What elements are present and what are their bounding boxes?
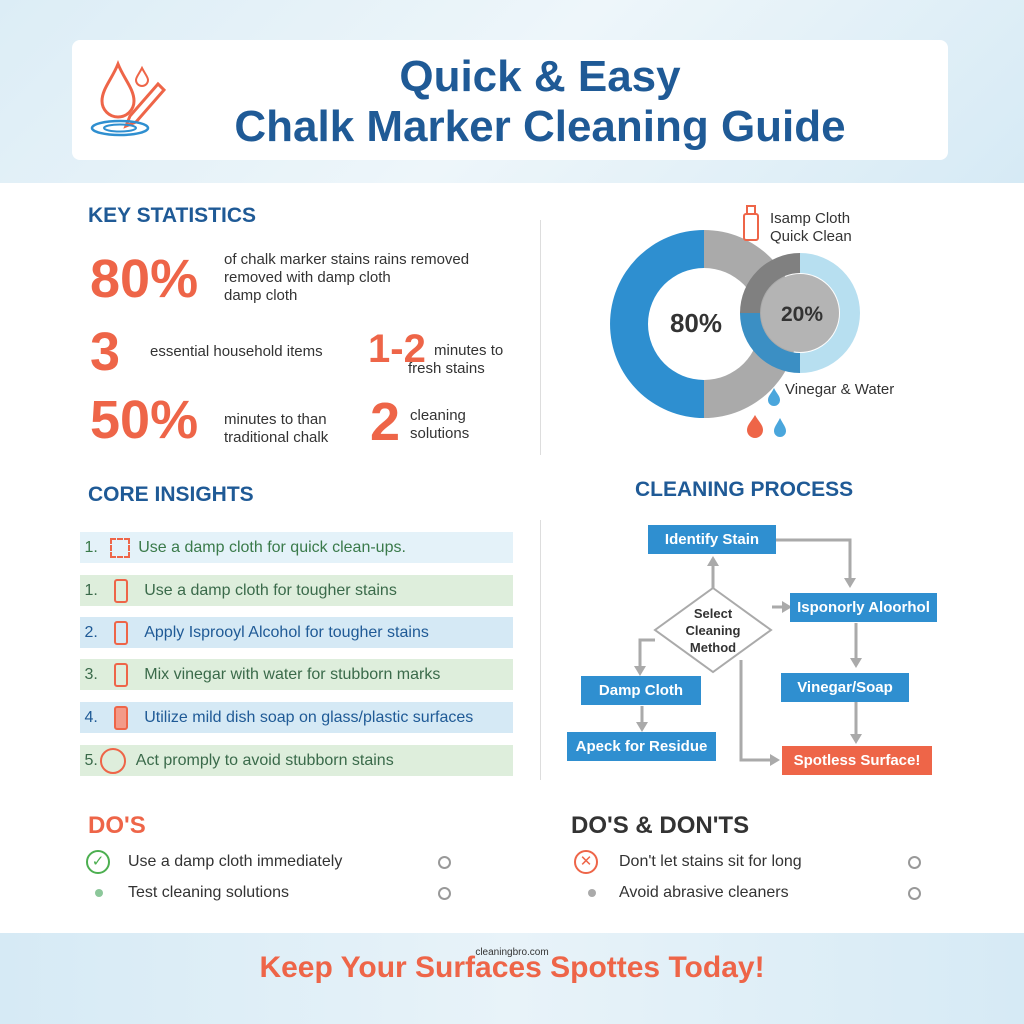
do's & don'ts heading: DO'S & DON'TS — [571, 812, 749, 839]
background top — [0, 0, 1024, 183]
donut chart — [610, 205, 894, 438]
stats block: cleaning — [410, 407, 466, 424]
insights list: 1. Use a damp cloth for tougher stains — [84, 582, 397, 599]
don'ts list: Don't let stains sit for long — [619, 853, 802, 870]
insights list: 5. Act promply to avoid stubborn stains — [84, 752, 394, 769]
don'ts list: Avoid abrasive cleaners — [619, 884, 789, 901]
stats block: traditional chalk — [224, 429, 328, 446]
heading: key statistics: KEY STATISTICS — [88, 204, 256, 227]
insights list: 4. Utilize mild dish soap on glass/plastic surfaces — [84, 709, 473, 726]
stats block: removed with damp cloth — [224, 269, 391, 286]
do's heading: DO'S — [88, 812, 146, 839]
stats block: minutes to than — [224, 411, 327, 428]
flowchart: Damp Cloth — [599, 682, 683, 699]
footer slogan: Keep Your Surfaces Spottes Today! — [259, 951, 765, 984]
stats block: 1-2 — [368, 327, 426, 371]
footer band — [0, 933, 1024, 1024]
stats block: minutes to — [434, 342, 503, 359]
stats block: damp cloth — [224, 287, 297, 304]
flowchart: Select — [694, 606, 733, 621]
insights list — [80, 532, 513, 776]
donut chart: Quick Clean — [770, 228, 852, 245]
donut chart: Vinegar & Water — [785, 381, 894, 398]
flowchart: Apeck for Residue — [576, 738, 707, 755]
title — [234, 52, 846, 151]
stats block: 50% — [90, 390, 198, 450]
insights list: 3. Mix vinegar with water for stubborn marks — [84, 666, 440, 683]
stats block: solutions — [410, 425, 469, 442]
donut chart: 20% — [781, 303, 823, 326]
heading: core insights: CORE INSIGHTS — [88, 483, 254, 506]
insights list: 1. Use a damp cloth for quick clean-ups. — [84, 539, 406, 556]
flowchart — [567, 525, 937, 775]
stats block: of chalk marker stains rains removed — [224, 251, 469, 268]
stats block: 80% — [90, 249, 198, 309]
stats block: 3 — [90, 322, 120, 382]
dividers — [540, 220, 541, 455]
donut chart: Isamp Cloth — [770, 210, 850, 227]
flowchart: Vinegar/Soap — [797, 679, 893, 696]
do's list: Use a damp cloth immediately — [128, 853, 342, 870]
flowchart: Method — [690, 640, 736, 655]
do's list: Test cleaning solutions — [128, 884, 289, 901]
stats block: fresh stains — [408, 360, 485, 377]
heading: cleaning process: CLEANING PROCESS — [635, 478, 853, 501]
flowchart: Spotless Surface! — [794, 752, 920, 769]
do's list: ✓ — [92, 853, 104, 870]
title: Quick & Easy — [399, 52, 681, 101]
footer band: cleaningbro.com — [475, 947, 549, 958]
flowchart: Cleaning — [686, 623, 741, 638]
donut chart: 80% — [670, 308, 722, 338]
stats block: essential household items — [150, 343, 323, 360]
don'ts list — [574, 850, 921, 901]
stats block — [90, 249, 503, 452]
title: Chalk Marker Cleaning Guide — [234, 102, 846, 151]
don'ts list: ✕ — [580, 853, 592, 870]
flowchart: Isponorly Aloorhol — [797, 599, 930, 616]
flowchart: Identify Stain — [665, 531, 759, 548]
do's list — [86, 850, 451, 901]
stats block: 2 — [370, 392, 400, 452]
insights list: 2. Apply Isprooyl Alcohol for tougher stains — [84, 624, 429, 641]
icon: drop and pencil — [90, 60, 166, 136]
header panel — [72, 40, 948, 160]
